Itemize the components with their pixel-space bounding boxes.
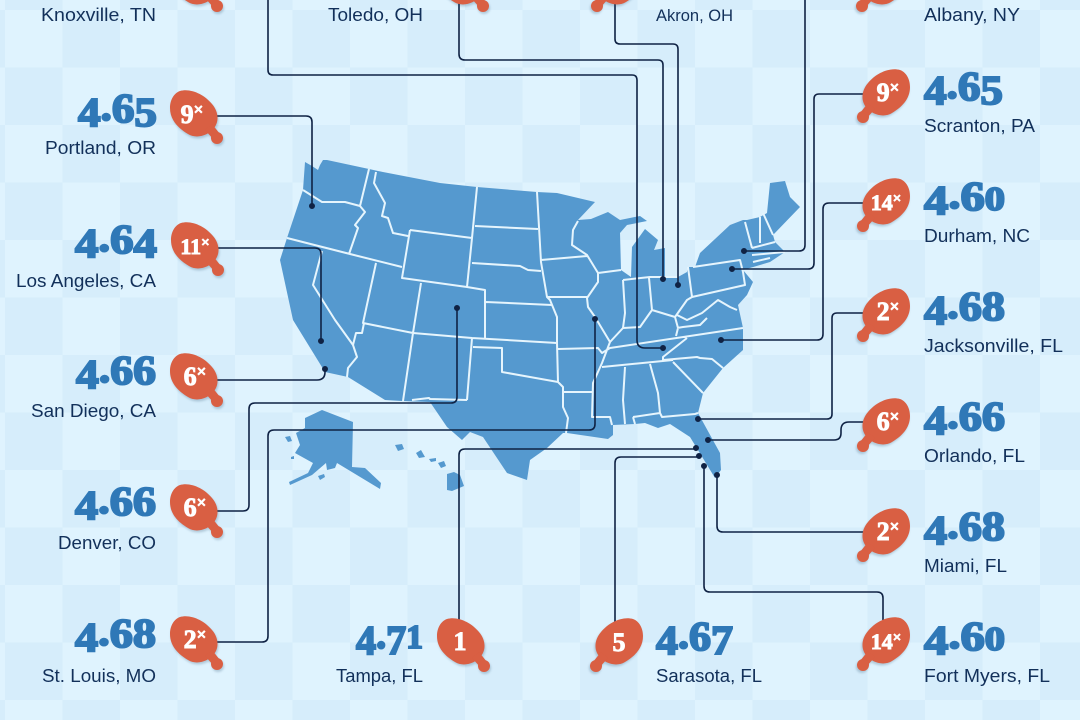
entry: Jacksonville [857, 281, 1063, 356]
entry: Portland: Portland, OR [45, 138, 156, 158]
entry: Durham: × [893, 191, 901, 207]
entry: Los Angeles: 4 [134, 220, 157, 266]
entry: Orlando: . [947, 391, 959, 437]
entry: Denver: 66 [110, 478, 156, 524]
entry: Jacksonville: . [947, 281, 959, 327]
entry: Tampa: 4 [356, 617, 376, 663]
entry: Durham: 4 [924, 177, 944, 223]
entry: Durham: . [948, 171, 960, 217]
line: Portland [215, 116, 312, 206]
entry: Scranton: 5 [980, 67, 1003, 113]
entry: St. Louis: . [98, 608, 110, 654]
leader lines and location dots [215, 0, 883, 642]
line: Durham [721, 203, 866, 340]
entry: Akron: Akron, OH [656, 6, 733, 25]
entry: Knoxville [41, 0, 223, 25]
line: Fort Myers [704, 466, 883, 620]
entry: Miami: 68 [959, 503, 1005, 549]
entry: Portland: 6 [112, 85, 134, 131]
entry: San Diego: San Diego, CA [31, 401, 156, 421]
line: Denver [215, 308, 457, 511]
entry: Orlando: 66 [959, 393, 1005, 439]
entry: Fort Myers: Fort Myers, FL [924, 666, 1050, 686]
entry: Orlando: × [890, 407, 899, 426]
entry: San Diego: 4 [76, 351, 96, 397]
line: Orlando [708, 422, 866, 440]
entry: Orlando [857, 391, 1025, 466]
entry: Fort Myers: 0 [985, 621, 1005, 658]
entry: Los Angeles [16, 214, 224, 291]
entry: Denver: . [98, 476, 110, 522]
entry: Fort Myers: . [948, 611, 960, 657]
entry: Fort Myers: 14 [871, 629, 893, 654]
entry: Miami: . [947, 501, 959, 547]
entry: Fort Myers: 6 [960, 613, 985, 659]
entry: Portland: 9 [181, 100, 194, 129]
entry: San Diego: 66 [110, 347, 156, 393]
entry: Tampa [336, 611, 490, 686]
entry: Portland: × [194, 100, 203, 119]
entry: Los Angeles: . [98, 214, 110, 260]
dots [309, 203, 747, 478]
Hawaii [395, 444, 464, 491]
line: Sarasota [615, 457, 699, 622]
map of the United States [280, 160, 800, 491]
entry: St. Louis: 4 [75, 614, 96, 660]
line: Akron [615, 0, 678, 285]
entry: Miami: × [890, 517, 899, 536]
entry: Miami: 4 [924, 507, 944, 553]
entry: Knoxville: Knoxville, TN [41, 5, 156, 25]
entry: Portland [45, 83, 223, 158]
entry: St. Louis: 68 [110, 610, 156, 656]
entry: Los Angeles: 4 [75, 220, 96, 266]
entry: Scranton [857, 61, 1035, 136]
entry: Los Angeles: 11 [180, 234, 201, 259]
line: Jacksonville [698, 313, 866, 419]
entry: Tampa: 1 [406, 619, 423, 656]
entry: Tampa: Tampa, FL [336, 666, 423, 686]
entry: St. Louis: × [197, 625, 206, 644]
entry: Albany: Albany, NY [924, 5, 1020, 25]
entry: Albany [856, 0, 1020, 25]
entry: Jacksonville: 4 [924, 287, 944, 333]
entry: San Diego: × [197, 362, 206, 381]
entry: Portland: 4 [78, 89, 98, 135]
entry: Sarasota: 6 [689, 613, 711, 659]
entry: San Diego: 6 [184, 362, 197, 391]
line: Toledo [459, 0, 663, 279]
line: Los Angeles [215, 248, 321, 341]
entry: St. Louis: 2 [184, 625, 197, 654]
line: San Diego [215, 369, 325, 380]
entry: Portland: . [101, 83, 112, 129]
entry: Miami: Miami, FL [924, 556, 1007, 576]
entry: Scranton: 6 [958, 63, 980, 109]
line: St. Louis [215, 319, 595, 642]
entry: Tampa: . [376, 611, 386, 657]
entry: Denver: Denver, CO [58, 533, 156, 553]
entry: Sarasota [590, 611, 762, 686]
entry: Jacksonville: Jacksonville, FL [924, 336, 1063, 356]
entry: Tampa: 1 [454, 627, 466, 656]
entry: Durham: 0 [985, 181, 1005, 218]
entry: San Diego [31, 345, 223, 421]
entry: Denver: × [197, 493, 206, 512]
entry: Denver: 4 [75, 482, 96, 528]
entry: Portland: 5 [134, 89, 157, 135]
entry: Akron [591, 0, 733, 25]
entry: Scranton: 4 [924, 67, 944, 113]
entry: Toledo: Toledo, OH [328, 5, 423, 25]
entry: St. Louis: St. Louis, MO [42, 666, 156, 686]
state borders [287, 169, 785, 433]
entry: Toledo [328, 0, 489, 25]
entry: Durham [857, 171, 1030, 246]
entry: Los Angeles: Los Angeles, CA [16, 271, 156, 291]
entry: Sarasota: 4 [656, 617, 676, 663]
entry: Sarasota: . [678, 611, 689, 657]
line: Miami [717, 475, 866, 532]
line: Albany [744, 0, 805, 251]
line: Scranton [732, 94, 866, 269]
entry: Scranton: Scranton, PA [924, 116, 1035, 136]
entry: Jacksonville: 2 [877, 297, 890, 326]
entry: Sarasota: Sarasota, FL [656, 666, 762, 686]
entry: Denver: 6 [184, 493, 197, 522]
entry: Scranton: . [947, 61, 958, 107]
entry: Fort Myers: × [893, 630, 901, 646]
line: Tampa [459, 449, 696, 622]
entry: Jacksonville: 68 [959, 283, 1005, 329]
Alaska islands [285, 436, 325, 480]
entry: St. Louis [42, 608, 223, 686]
entry: Durham: Durham, NC [924, 226, 1030, 246]
entry: Scranton: 9 [877, 78, 890, 107]
entry: Sarasota: 7 [711, 617, 733, 663]
contiguous states [280, 160, 800, 480]
entry: Tampa: 7 [386, 617, 406, 663]
entry: Miami: 2 [877, 517, 890, 546]
entry: Los Angeles: × [201, 235, 210, 251]
Alaska [289, 410, 381, 489]
entry: Orlando: Orlando, FL [924, 446, 1025, 466]
entry: Miami [857, 501, 1007, 576]
entry: Durham: 6 [960, 173, 985, 219]
entry: Durham: 14 [871, 190, 893, 215]
entry: Los Angeles: 6 [110, 216, 134, 262]
entry: Orlando: 6 [877, 407, 890, 436]
entry: Denver [58, 476, 223, 553]
entry: San Diego: . [99, 345, 110, 391]
entry: Scranton: × [890, 78, 899, 97]
entry: Fort Myers: 4 [924, 617, 944, 663]
entry: Orlando: 4 [924, 397, 944, 443]
line: Knoxville [268, 0, 663, 348]
entry: Jacksonville: × [890, 297, 899, 316]
entry: Fort Myers [857, 611, 1050, 686]
entry: Sarasota: 5 [612, 628, 626, 657]
